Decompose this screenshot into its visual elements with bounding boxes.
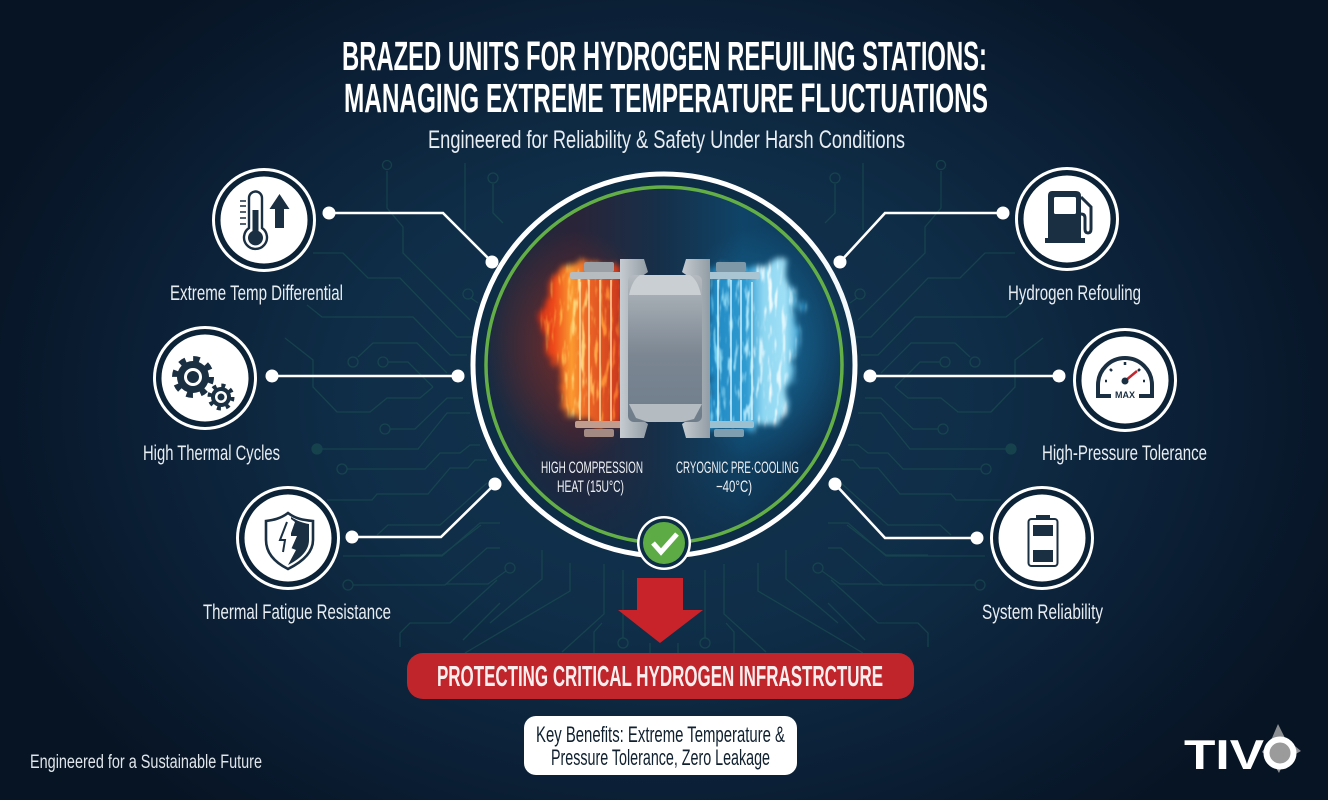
heat exchanger unit xyxy=(570,259,760,438)
icon: shield with lightning xyxy=(238,488,338,588)
circuit traces background: right xyxy=(678,160,1043,655)
title xyxy=(342,33,988,121)
connector lines xyxy=(272,213,1059,538)
hot side label: HEAT (15U°C) xyxy=(557,478,624,496)
subtitle: Engineered for Reliability & Safety Under Harsh Conditions xyxy=(428,126,905,154)
icon: thermometer with arrow xyxy=(214,170,314,270)
icon: fuel pump xyxy=(1016,168,1118,270)
bottom cap xyxy=(629,404,702,422)
callout: key benefits: Key Benefits: Extreme Temperature & xyxy=(536,722,785,747)
hot side label xyxy=(541,459,643,496)
green ring xyxy=(486,187,842,543)
logo: TIVO: TIV xyxy=(1184,731,1264,778)
circuit traces background: left xyxy=(285,160,650,655)
hot side label: HIGH COMPRESSION xyxy=(541,459,643,477)
cold side label: CRYOGNIC PRE·COOLING xyxy=(676,459,799,477)
outer white ring xyxy=(473,174,855,556)
label: high-pressure tolerance: High-Pressure Tolerance xyxy=(1042,442,1207,465)
cold side label xyxy=(676,459,799,496)
label: thermal fatigue resistance: Thermal Fatigue Resistance xyxy=(203,601,391,624)
hot flames xyxy=(534,255,620,430)
flame bright streaks xyxy=(540,259,620,429)
arrow: down xyxy=(618,578,703,643)
label: hydrogen refouling: Hydrogen Refouling xyxy=(1008,282,1141,305)
flame base xyxy=(534,255,620,430)
central circle xyxy=(473,174,860,556)
icon: pressure gauge: MAX xyxy=(1115,390,1135,400)
left flange xyxy=(620,259,648,438)
vapor base xyxy=(710,254,809,436)
cold side label: −40°C) xyxy=(716,478,752,496)
cold vapor xyxy=(710,254,809,436)
callout: key benefits xyxy=(524,716,797,775)
icon: pressure gauge xyxy=(1074,330,1176,430)
icon: gears xyxy=(154,328,256,428)
label: high thermal cycles: High Thermal Cycles xyxy=(143,442,280,465)
hot core xyxy=(570,262,622,437)
vapor bright streaks xyxy=(710,258,808,429)
icon: battery xyxy=(992,488,1092,588)
disc edge shading xyxy=(486,187,842,543)
right flange xyxy=(682,259,710,438)
banner: protecting infrastructure: PROTECTING CRITICAL HYDROGEN INFRASTRCTURE xyxy=(437,661,883,693)
inner gradient disc xyxy=(486,187,842,543)
label: system reliability: System Reliability xyxy=(982,601,1103,624)
center block xyxy=(628,275,702,422)
heat glow xyxy=(485,230,665,460)
cold glow xyxy=(670,225,860,465)
logo: TIVO xyxy=(1184,724,1301,778)
cold core xyxy=(706,262,760,437)
footer tagline: Engineered for a Sustainable Future xyxy=(30,752,262,773)
callout: key benefits: Pressure Tolerance, Zero Leakage xyxy=(551,745,770,770)
banner: protecting infrastructure xyxy=(407,653,914,699)
label: extreme temp differential: Extreme Temp Differential xyxy=(170,282,343,305)
connector dots xyxy=(266,206,1066,544)
top cap xyxy=(629,275,701,295)
check badge xyxy=(637,516,691,570)
